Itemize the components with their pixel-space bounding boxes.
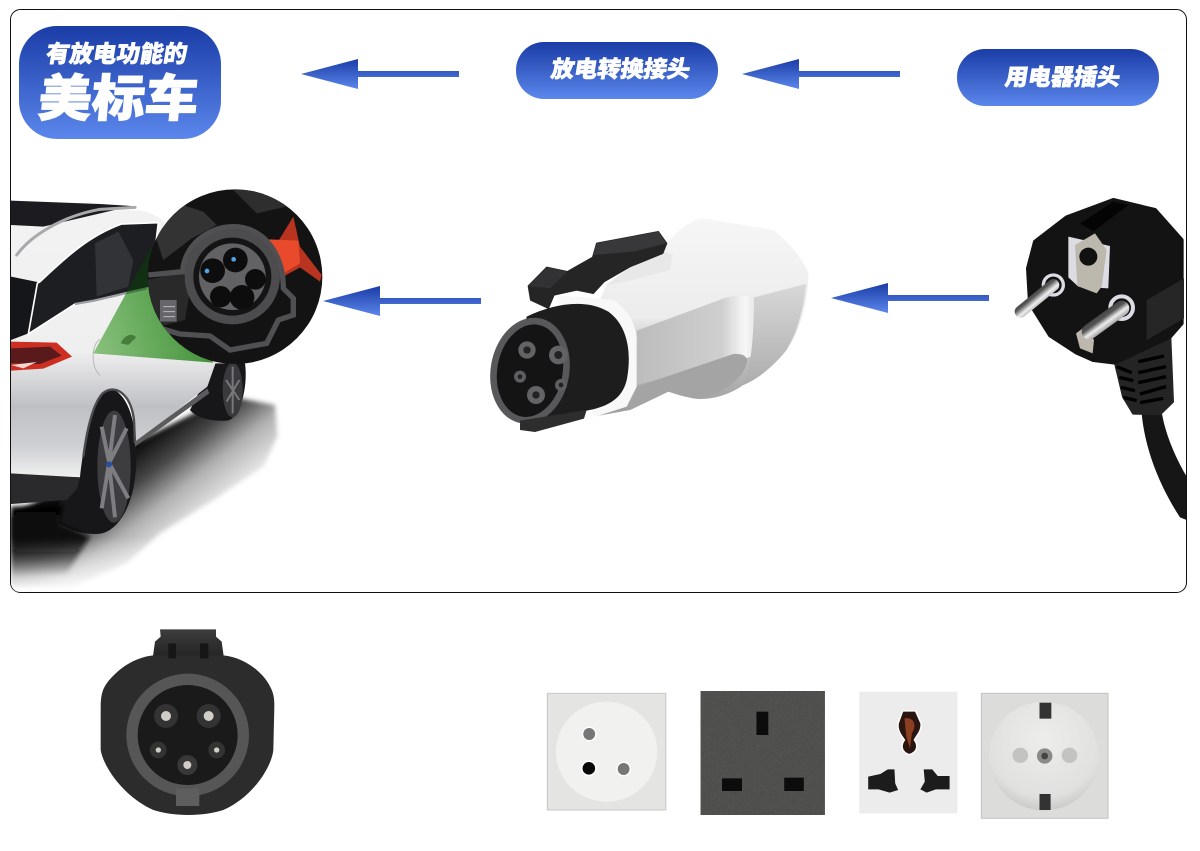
illustration: discharge adapter — [486, 218, 808, 432]
arrow: from appliance plug label to adapter label — [742, 59, 900, 89]
inlet hinge slots — [168, 643, 208, 658]
right pin — [1076, 296, 1133, 353]
side window — [28, 223, 158, 334]
roof rail — [17, 207, 135, 255]
label: 用电器插头 — [957, 49, 1159, 106]
rear wheel tyre — [53, 387, 136, 534]
panel: connection diagram frame — [10, 10, 1186, 592]
lower bumper — [11, 473, 80, 504]
socket row — [547, 691, 1108, 818]
plug strain relief — [1115, 337, 1173, 414]
sill — [135, 388, 209, 447]
adapter black nose — [513, 304, 629, 430]
adapter front ring and pins — [486, 315, 587, 432]
label: 有放电功能的美标车: 美标车 — [36, 71, 201, 127]
arrow: adapter to car port — [323, 286, 481, 316]
door handle — [121, 335, 136, 345]
illustration: white electric car with charge port magnified — [7, 189, 322, 592]
rear glass — [11, 277, 37, 340]
socket: three round holes — [547, 693, 666, 810]
illustration: vehicle charging inlet front view — [101, 629, 274, 815]
socket: dark British type — [701, 691, 825, 815]
front wheel — [190, 363, 246, 421]
magnified charge port — [143, 189, 322, 364]
socket: universal — [859, 692, 957, 813]
adapter rear section — [743, 284, 806, 385]
tail light — [11, 342, 72, 371]
illustration: Schuko appliance plug — [1021, 200, 1187, 520]
wheel arch trim — [83, 390, 135, 457]
label: 用电器插头: 用电器插头 — [1003, 64, 1122, 90]
insert and five contacts — [199, 243, 266, 310]
arrow: from adapter label to car label — [301, 59, 459, 89]
label: 有放电功能的美标车: 有放电功能的 — [44, 41, 189, 68]
adapter white housing — [580, 218, 808, 417]
adapter lower face — [630, 354, 747, 410]
car ground shadow — [7, 398, 277, 592]
plug body — [1028, 200, 1182, 363]
orange latch — [279, 216, 322, 282]
label: 放电转换接头: 放电转换接头 — [549, 56, 692, 82]
earth clip — [1068, 233, 1110, 293]
plug cord — [1142, 412, 1187, 520]
adapter mid band — [637, 296, 755, 385]
adapter latch — [528, 232, 673, 308]
under-car dark — [11, 505, 90, 580]
inlet collar — [126, 674, 249, 806]
rear wheel rim — [97, 411, 131, 523]
inlet pins — [150, 704, 225, 775]
inlet lid hinge — [153, 629, 224, 658]
label: 放电转换接头 — [516, 42, 718, 99]
left pin — [1021, 275, 1063, 312]
inlet body — [101, 655, 274, 815]
adapter front collar — [555, 295, 637, 417]
green magnifier beam — [93, 248, 213, 363]
charge port door — [93, 339, 100, 375]
car body — [11, 210, 217, 477]
socket: Schuko — [981, 693, 1108, 818]
label: 有放电功能的美标车 — [19, 26, 221, 139]
housing outline — [143, 227, 293, 350]
arrow: plug to adapter — [831, 283, 989, 313]
roof — [11, 201, 132, 227]
